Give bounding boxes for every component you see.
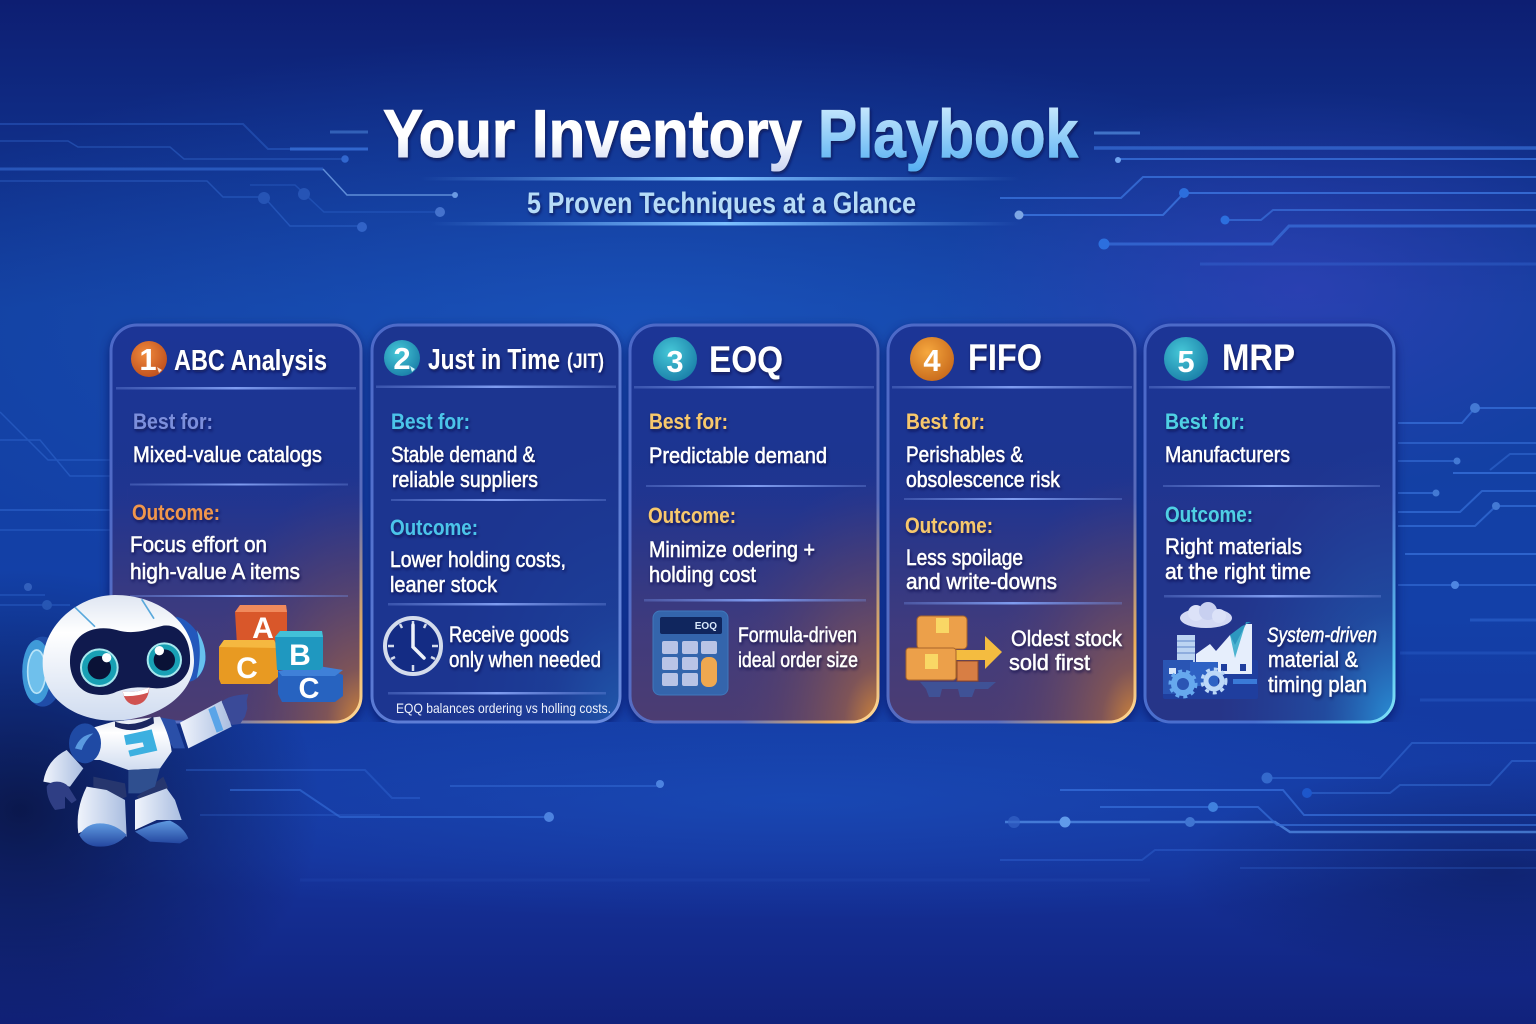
heading: EOQ: [709, 339, 783, 380]
circuit lines top right: [1000, 133, 1536, 264]
best for: [906, 409, 1061, 492]
icon: stock boxes and arrow: [906, 616, 1002, 697]
best for: Predictable demand: [649, 443, 827, 468]
badge 3: [653, 337, 697, 381]
callout text: Oldest stock: [1011, 626, 1123, 651]
best for: Best for:: [391, 409, 470, 434]
callout text: timing plan: [1268, 672, 1367, 697]
best for: [133, 409, 322, 467]
best for: Best for:: [906, 409, 985, 434]
best for: Perishables &: [906, 442, 1023, 467]
outcome: [1165, 502, 1311, 584]
badge 2: 2: [393, 341, 411, 376]
circuit lines top left: [0, 124, 458, 232]
outcome: [390, 515, 566, 597]
badge 1: 1: [139, 342, 157, 377]
outcome: [130, 500, 300, 584]
best for: Mixed-value catalogs: [133, 442, 322, 467]
icon: ABC blocks: B: [289, 639, 311, 672]
panel: ABC Analysis: [111, 325, 361, 722]
heading: (JIT): [567, 350, 604, 373]
heading: FIFO: [968, 337, 1042, 378]
callout text: [1267, 624, 1377, 697]
icon: clock: [385, 618, 441, 674]
callout text: [1009, 626, 1123, 675]
badge 3: 3: [666, 344, 684, 379]
callout text: [449, 622, 601, 672]
best for: Manufacturers: [1165, 442, 1290, 467]
callout text: sold first: [1009, 650, 1090, 675]
outcome: leaner stock: [390, 572, 498, 597]
circuit lines left middle: [0, 412, 110, 610]
outcome: high-value A items: [130, 559, 300, 584]
best for: Stable demand &: [391, 442, 535, 467]
icon: ABC blocks: C: [236, 652, 258, 685]
outcome: and write-downs: [906, 569, 1057, 594]
icon: calculator: EOQ: [695, 621, 717, 632]
outcome: Minimize odering +: [649, 537, 815, 562]
icon: ABC blocks: C: [299, 673, 320, 705]
callout text: only when needed: [449, 647, 601, 672]
best for: [649, 409, 827, 468]
icon: ABC blocks: [219, 605, 343, 705]
callout text: System-driven: [1267, 624, 1377, 647]
subtitle: 5 Proven Techniques at a Glance: [527, 187, 916, 220]
outcome: [905, 513, 1057, 594]
best for: reliable suppliers: [392, 467, 538, 492]
circuit lines bottom: [186, 743, 1536, 880]
callout text: [738, 624, 858, 672]
panel: MRP: [1145, 325, 1394, 722]
outcome: Lower holding costs,: [390, 547, 566, 572]
title rule top: [420, 177, 1020, 180]
best for: [391, 409, 538, 492]
callout text: material &: [1268, 647, 1358, 672]
badge 1: [131, 341, 167, 377]
badge 4: [910, 337, 954, 381]
outcome: Outcome:: [390, 515, 478, 540]
title: Playbook: [818, 96, 1078, 172]
outcome: Right materials: [1165, 534, 1302, 559]
best for: obsolescence risk: [906, 467, 1061, 492]
badge 4: 4: [923, 343, 941, 378]
badge 2: [384, 340, 420, 376]
icon: factory: [1163, 602, 1258, 699]
heading: MRP: [1222, 337, 1295, 378]
outcome: holding cost: [649, 562, 756, 587]
callout text: ideal order size: [738, 649, 858, 672]
title: Your Inventory: [383, 96, 802, 172]
outcome: [648, 503, 815, 587]
icon: ABC blocks: A: [252, 612, 274, 645]
circuit lines right middle: [1398, 403, 1536, 700]
badge 5: [1164, 337, 1208, 381]
callout text: Receive goods: [449, 622, 569, 647]
heading: Just in Time: [428, 344, 560, 376]
best for: Best for:: [649, 409, 728, 434]
heading: ABC Analysis: [174, 345, 327, 377]
panel: EOQ: [630, 325, 878, 722]
footnote: EQQ balances ordering vs holling costs.: [396, 700, 611, 716]
panel: FIFO: [888, 325, 1135, 722]
outcome: Outcome:: [905, 513, 993, 538]
outcome: Outcome:: [1165, 502, 1253, 527]
icon: calculator: [653, 611, 728, 695]
outcome: Less spoilage: [906, 545, 1023, 570]
outcome: Outcome:: [648, 503, 736, 528]
icon: robot mascot: [22, 595, 248, 847]
best for: [1165, 409, 1290, 467]
best for: Best for:: [1165, 409, 1245, 434]
panel: Just in Time: [372, 325, 620, 722]
title rule bottom: [430, 222, 1020, 226]
outcome: at the right time: [1165, 559, 1311, 584]
title: [383, 96, 1078, 172]
callout text: Formula-driven: [738, 624, 857, 647]
outcome: Focus effort on: [130, 532, 267, 557]
best for: Best for:: [133, 409, 213, 434]
badge 5: 5: [1177, 344, 1195, 379]
outcome: Outcome:: [132, 500, 220, 525]
